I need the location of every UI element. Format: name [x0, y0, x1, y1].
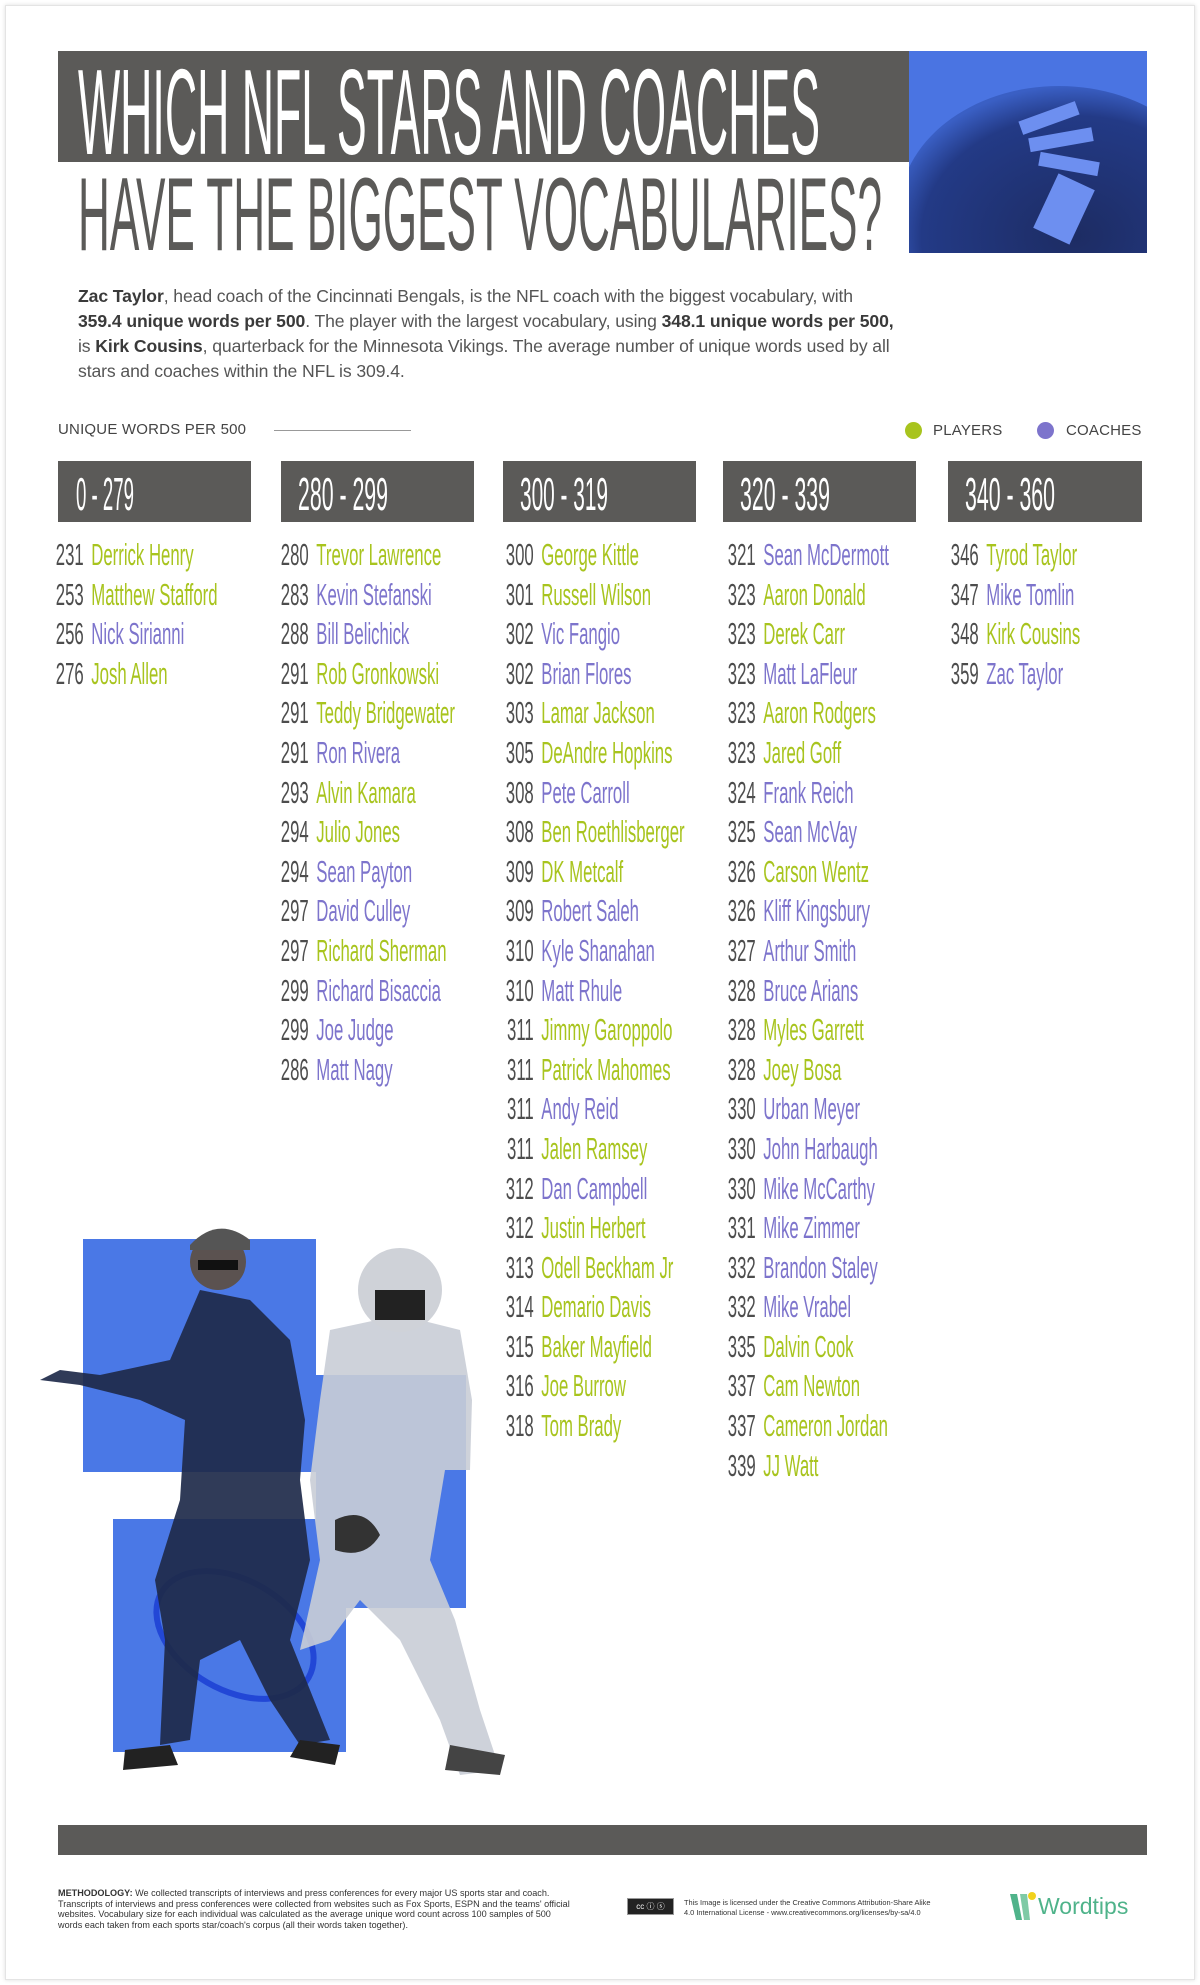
column 1 list: 256: [56, 616, 84, 651]
column 3 list: 301: [506, 577, 534, 612]
column 2 list: 299: [281, 1012, 309, 1047]
column 3 list: Matt Rhule: [541, 973, 622, 1008]
column 4 list: Mike McCarthy: [763, 1170, 875, 1206]
column 2 list: 291: [281, 695, 309, 730]
legend: COACHES: [1066, 422, 1142, 439]
column 3 list: 311: [507, 1091, 534, 1126]
column 3 list: 308: [506, 775, 534, 810]
license text: [684, 1898, 930, 1917]
column headers: 320 - 339: [740, 468, 830, 520]
column 3 list: 302: [506, 656, 534, 691]
column 5 list: Zac Taylor: [986, 656, 1063, 691]
column 2 list: Sean Payton: [316, 854, 412, 889]
column 4 list: 326: [728, 893, 756, 928]
column 3 list: [506, 537, 685, 1443]
photo collage: coach and player: [40, 1228, 505, 1775]
column 2 list: Teddy Bridgewater: [316, 695, 455, 730]
column 4 list: 330: [728, 1131, 756, 1166]
methodology: words each taken from each sports star/coach's corpus (all their words taken together).: [58, 1920, 408, 1930]
column headers: [58, 461, 1142, 522]
column 2 list: Richard Sherman: [316, 933, 447, 968]
column 1 list: Josh Allen: [91, 656, 168, 691]
column 4 list: 339: [728, 1448, 756, 1483]
column 2 list: 294: [281, 814, 309, 849]
column 5 list: [951, 537, 1080, 691]
column 4 list: Cam Newton: [763, 1368, 860, 1403]
column 4 list: 323: [728, 616, 756, 651]
column 3 list: Pete Carroll: [541, 775, 630, 810]
column 4 list: Kliff Kingsbury: [763, 893, 870, 928]
column 4 list: 323: [728, 656, 756, 691]
methodology: websites. Vocabulary size for each individual was calculated as the average unique word count across 100 samples of 500: [58, 1909, 551, 1919]
column 4 list: JJ Watt: [763, 1448, 818, 1483]
column 3 list: 316: [506, 1368, 534, 1403]
column 3 list: 318: [506, 1408, 534, 1443]
column 4 list: Aaron Rodgers: [763, 695, 876, 730]
methodology: Transcripts of interviews and press conferences were collected from websites such as Fox Sports, ESPN and the teams' official: [58, 1899, 570, 1909]
column 3 list: Andy Reid: [541, 1091, 619, 1126]
column 3 list: 300: [506, 537, 534, 572]
column 3 list: 302: [506, 616, 534, 651]
column 2 list: Ron Rivera: [316, 735, 400, 770]
column 3 list: Odell Beckham Jr: [541, 1250, 673, 1285]
column 3 list: 311: [507, 1012, 534, 1047]
column 3 list: 303: [506, 695, 534, 730]
column 4 list: 332: [728, 1289, 756, 1324]
cc license badge: [627, 1898, 674, 1915]
column 4 list: 328: [728, 1052, 756, 1087]
column 1 list: Nick Sirianni: [91, 616, 184, 651]
column 4 list: Urban Meyer: [763, 1091, 860, 1126]
intro paragraph: Zac Taylor, head coach of the Cincinnati Bengals, is the NFL coach with the biggest vocabulary, with: [78, 286, 853, 306]
column 4 list: 324: [728, 775, 756, 810]
column 4 list: Derek Carr: [763, 616, 845, 651]
column 4 list: Matt LaFleur: [763, 656, 857, 691]
column 3 list: 309: [506, 893, 534, 928]
legend: PLAYERS: [933, 422, 1002, 439]
column 3 list: DeAndre Hopkins: [541, 735, 672, 770]
legend: [905, 422, 1142, 439]
column 3 list: DK Metcalf: [541, 854, 623, 889]
column 2 list: 293: [281, 775, 309, 810]
column 4 list: 323: [728, 695, 756, 730]
column 1 list: Derrick Henry: [91, 537, 194, 572]
column 3 list: 310: [506, 933, 534, 968]
column 3 list: George Kittle: [541, 537, 639, 572]
column 5 list: Kirk Cousins: [986, 616, 1080, 651]
column 3 list: 315: [506, 1329, 534, 1364]
logo: Wordtips: Wordtips: [1038, 1893, 1128, 1919]
column 4 list: [728, 537, 889, 1483]
column 2 list: 297: [281, 933, 309, 968]
column 3 list: 314: [506, 1289, 534, 1324]
column 1 list: [56, 537, 218, 691]
column 1 list: 231: [56, 537, 84, 572]
column headers: 0 - 279: [76, 468, 134, 520]
column headers: 300 - 319: [520, 468, 608, 520]
column 4 list: 323: [728, 577, 756, 612]
column 4 list: Joey Bosa: [763, 1052, 841, 1087]
column 5 list: 346: [951, 537, 979, 572]
column 3 list: Jalen Ramsey: [541, 1131, 647, 1166]
intro paragraph: [78, 286, 894, 381]
column 5 list: 348: [951, 616, 979, 651]
column 3 list: 312: [506, 1170, 534, 1206]
column 4 list: 330: [728, 1091, 756, 1126]
column 4 list: 337: [728, 1408, 756, 1443]
intro paragraph: 359.4 unique words per 500. The player with the largest vocabulary, using 348.1 unique words per 500,: [78, 311, 894, 331]
column 3 list: Jimmy Garoppolo: [541, 1012, 672, 1047]
column 3 list: 305: [506, 735, 534, 770]
column 4 list: 337: [728, 1368, 756, 1403]
column 2 list: 294: [281, 854, 309, 889]
column 5 list: Mike Tomlin: [986, 577, 1074, 612]
cc license badge: cc ⓘ ⓢ: [636, 1902, 665, 1911]
column 3 list: 310: [506, 973, 534, 1008]
intro paragraph: is Kirk Cousins, quarterback for the Minnesota Vikings. The average number of unique words used by all: [78, 336, 890, 356]
column 4 list: Brandon Staley: [763, 1250, 878, 1285]
blue blocks: [83, 1239, 466, 1752]
column headers: 280 - 299: [298, 468, 388, 520]
column 4 list: Arthur Smith: [763, 933, 856, 968]
column 3 list: Patrick Mahomes: [541, 1052, 671, 1087]
coach figure: [40, 1229, 340, 1770]
column 4 list: 326: [728, 854, 756, 889]
column 4 list: 323: [728, 735, 756, 770]
column 4 list: 327: [728, 933, 756, 968]
methodology: METHODOLOGY: We collected transcripts of interviews and press conferences for every major US sports star and coach.: [58, 1888, 549, 1898]
title: [58, 51, 909, 256]
player figure: [300, 1248, 505, 1775]
column 2 list: Trevor Lawrence: [316, 537, 441, 572]
axis label: UNIQUE WORDS PER 500: [58, 421, 246, 438]
column 2 list: [281, 537, 455, 1087]
column 4 list: 325: [728, 814, 756, 849]
column 4 list: Sean McDermott: [763, 537, 889, 572]
column 2 list: Richard Bisaccia: [316, 973, 441, 1008]
column 1 list: 276: [56, 656, 84, 691]
column 4 list: Dalvin Cook: [763, 1329, 854, 1364]
column 3 list: Russell Wilson: [541, 577, 651, 612]
column 1 list: 253: [56, 577, 84, 612]
column 4 list: 328: [728, 1012, 756, 1047]
column 1 list: Matthew Stafford: [91, 577, 218, 612]
column 2 list: 283: [281, 577, 309, 612]
column 4 list: 321: [728, 537, 756, 572]
column 2 list: 291: [281, 656, 309, 691]
column 3 list: 308: [506, 814, 534, 849]
column 3 list: 311: [507, 1131, 534, 1166]
column 4 list: Aaron Donald: [763, 577, 866, 612]
intro paragraph: stars and coaches within the NFL is 309.4.: [78, 361, 405, 381]
column 2 list: Julio Jones: [316, 814, 400, 849]
column 2 list: 297: [281, 893, 309, 928]
column 4 list: Jared Goff: [763, 735, 841, 770]
column 2 list: Alvin Kamara: [316, 775, 416, 810]
column 2 list: Matt Nagy: [316, 1052, 393, 1087]
column 4 list: 328: [728, 973, 756, 1008]
column 2 list: 288: [281, 616, 309, 651]
column 3 list: Dan Campbell: [541, 1170, 647, 1206]
license text: This Image is licensed under the Creative Commons Attribution-Share Alike: [684, 1898, 930, 1907]
column 3 list: 312: [506, 1210, 534, 1245]
column 3 list: 311: [507, 1052, 534, 1087]
column 3 list: Ben Roethlisberger: [541, 814, 685, 849]
column 2 list: 291: [281, 735, 309, 770]
column 3 list: Kyle Shanahan: [541, 933, 655, 968]
column 3 list: Joe Burrow: [541, 1368, 626, 1403]
column 2 list: Kevin Stefanski: [316, 577, 432, 612]
column 4 list: 335: [728, 1329, 756, 1364]
column 3 list: Justin Herbert: [541, 1210, 645, 1245]
column 3 list: Tom Brady: [541, 1408, 621, 1443]
license text: 4.0 International License - www.creativecommons.org/licenses/by-sa/4.0: [684, 1908, 921, 1917]
column 3 list: Lamar Jackson: [541, 695, 655, 730]
column 3 list: Vic Fangio: [541, 616, 620, 651]
column 2 list: Bill Belichick: [316, 616, 409, 651]
column 4 list: Sean McVay: [763, 814, 857, 849]
column 4 list: Frank Reich: [763, 775, 854, 810]
column 5 list: 347: [951, 577, 979, 612]
column 2 list: 280: [281, 537, 309, 572]
column 2 list: 286: [281, 1052, 309, 1087]
column 2 list: David Culley: [316, 893, 410, 928]
column 4 list: Myles Garrett: [763, 1012, 864, 1047]
column 3 list: Brian Flores: [541, 656, 632, 691]
column 4 list: John Harbaugh: [763, 1131, 878, 1166]
column 4 list: 331: [728, 1210, 756, 1245]
column 2 list: Joe Judge: [316, 1012, 394, 1047]
bottom bar: [58, 1825, 1147, 1855]
column 3 list: 309: [506, 854, 534, 889]
column 3 list: Demario Davis: [541, 1289, 651, 1324]
image: football: [909, 51, 1147, 253]
column 3 list: Baker Mayfield: [541, 1329, 652, 1364]
column 4 list: 330: [728, 1170, 756, 1206]
column 2 list: Rob Gronkowski: [316, 656, 439, 691]
column 4 list: Mike Zimmer: [763, 1210, 860, 1245]
column 4 list: Carson Wentz: [763, 854, 869, 889]
column 5 list: 359: [951, 656, 979, 691]
column 4 list: Bruce Arians: [763, 973, 858, 1008]
column 4 list: Mike Vrabel: [763, 1289, 851, 1324]
column 4 list: 332: [728, 1250, 756, 1285]
methodology: [58, 1888, 570, 1930]
column 4 list: Cameron Jordan: [763, 1408, 888, 1443]
column 5 list: Tyrod Taylor: [986, 537, 1077, 572]
column 3 list: Robert Saleh: [541, 893, 639, 928]
column 2 list: 299: [281, 973, 309, 1008]
column 3 list: 313: [506, 1250, 534, 1285]
